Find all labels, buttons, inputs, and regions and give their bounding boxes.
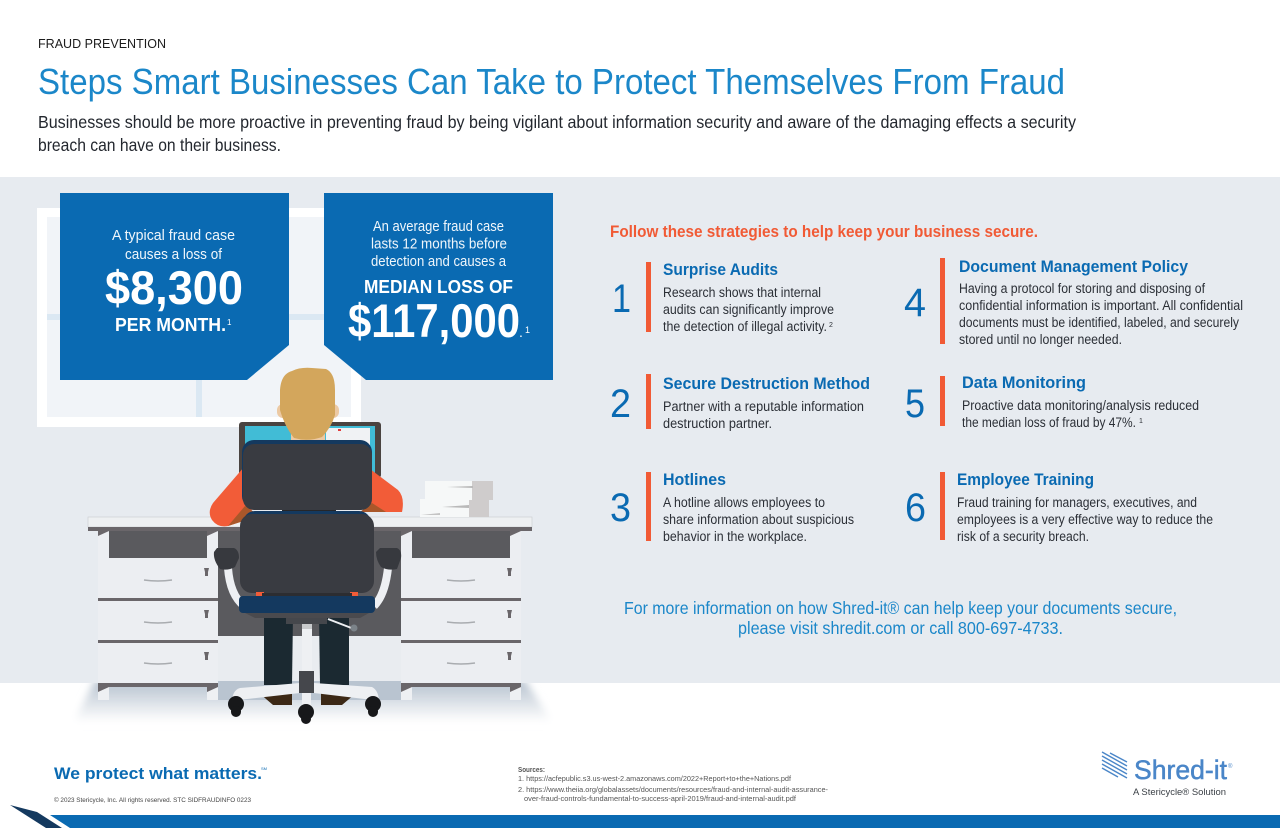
illustration: office scene — [37, 208, 532, 724]
right arm — [366, 469, 403, 512]
callout: median loss: . — [519, 324, 523, 340]
callout: median loss: detection and causes a — [371, 254, 507, 270]
step 5: data monitoring: 5 — [905, 382, 925, 426]
strategies heading: Follow these strategies to help keep your business secure. — [610, 222, 1038, 241]
step 1: surprise audits: audits can significantly improve — [663, 302, 834, 317]
step 4: document management policy: Having a protocol for storing and disposing of — [959, 281, 1205, 296]
sources: 2. https://www.theiia.org/globalassets/documents/resources/fraud-and-internal-audit-assurance- — [518, 785, 829, 794]
lower backrest — [243, 511, 371, 551]
call to action: For more information on how Shred-it® can help keep your documents secure, — [624, 598, 1177, 618]
callout: median loss: lasts 12 months before — [371, 236, 507, 252]
step 3: hotlines: share information about suspicious — [663, 512, 854, 527]
monitor — [239, 422, 381, 478]
step 6: employee training: 6 — [905, 486, 926, 530]
step 3: hotlines: Hotlines — [663, 471, 726, 489]
legs — [264, 615, 293, 685]
step 1: surprise audits: 2 — [829, 322, 833, 329]
step 4: document management policy: confidential information is important. All confidential — [959, 298, 1243, 313]
step 1: surprise audits: 1 — [612, 277, 631, 321]
sources: over-fraud-controls-fundamental-to-success-april-2019/fraud-and-internal-audit.pdf — [524, 794, 796, 803]
callout: monthly loss — [60, 193, 289, 380]
arm supports — [228, 568, 244, 606]
sources — [518, 765, 829, 803]
step 4: document management policy: 4 — [904, 281, 926, 325]
title: Steps Smart Businesses Can Take to Protect Themselves From Fraud — [38, 61, 1065, 102]
call to action: please visit shredit.com or call 800-697-4733. — [738, 618, 1063, 638]
step 5: data monitoring: the median loss of fraud by 47%. — [962, 415, 1136, 430]
callout: median loss — [324, 193, 553, 380]
step 4: document management policy: Document Management Policy — [959, 258, 1189, 276]
footer bar — [10, 805, 1280, 828]
step 3: hotlines: A hotline allows employees to — [663, 495, 825, 510]
step 6: employee training: risk of a security breach. — [957, 529, 1089, 544]
step 2: secure destruction method: Secure Destruction Method — [663, 375, 870, 393]
sources: 1. https://acfepublic.s3.us-west-2.amazonaws.com/2022+Report+to+the+Nations.pdf — [518, 774, 791, 783]
intro text: Businesses should be more proactive in preventing fraud by being vigilant about information security and aware of the damaging effects a security — [38, 112, 1076, 132]
icon: shred stripes — [1102, 752, 1127, 778]
step 6: employee training — [905, 471, 1213, 544]
shoes — [258, 690, 292, 705]
step 2: secure destruction method: 2 — [610, 382, 631, 426]
step 5: data monitoring: Data Monitoring — [962, 374, 1086, 392]
logo: Shred-it: A Stericycle® Solution — [1133, 787, 1226, 798]
armrests — [214, 548, 239, 570]
seat cushion — [256, 592, 264, 597]
left arm — [210, 467, 252, 526]
tagline: SM — [261, 766, 267, 771]
hair — [280, 368, 335, 440]
step 5: data monitoring — [905, 374, 1199, 430]
callout: monthly loss: $8,300 — [105, 261, 243, 314]
person — [210, 368, 403, 705]
tagline: We protect what matters. — [54, 764, 262, 783]
copyright: © 2023 Stericycle, Inc. All rights reserved. STC SIDFRAUDINFO 0223 — [54, 797, 252, 804]
grey band background — [0, 177, 1280, 683]
callout: median loss: An average fraud case — [373, 219, 504, 235]
step 5: data monitoring: Proactive data monitoring/analysis reduced — [962, 398, 1199, 413]
intro text — [38, 112, 1076, 155]
step 6: employee training: Fraud training for managers, executives, and — [957, 495, 1197, 510]
callout: median loss: MEDIAN LOSS OF — [364, 277, 513, 297]
step 4: document management policy — [904, 258, 1243, 347]
sources: Sources: — [518, 765, 545, 774]
step 6: employee training: Employee Training — [957, 471, 1094, 489]
step 3: hotlines — [610, 471, 854, 544]
step 2: secure destruction method — [610, 374, 870, 431]
chair base — [228, 624, 381, 724]
paper stack — [420, 481, 493, 517]
intro text: breach can have on their business. — [38, 135, 281, 155]
logo: Shred-it: ® — [1228, 763, 1233, 770]
upper backrest — [242, 440, 372, 508]
step 2: secure destruction method: Partner with a reputable information — [663, 399, 864, 414]
step 4: document management policy: stored until no longer needed. — [959, 332, 1122, 347]
callout: monthly loss: causes a loss of — [125, 247, 223, 263]
step 1: surprise audits — [612, 261, 834, 334]
callout: median loss: 1 — [525, 325, 530, 335]
step 3: hotlines: behavior in the workplace. — [663, 529, 807, 544]
step 1: surprise audits: the detection of illegal activity. — [663, 319, 827, 334]
step 4: document management policy: documents must be identified, labeled, and securely — [959, 315, 1239, 330]
left pedestal — [98, 531, 218, 700]
step 1: surprise audits: Research shows that internal — [663, 285, 821, 300]
logo: Shred-it: Shred-it — [1134, 755, 1227, 785]
neck and ears — [291, 425, 325, 447]
logo: Shred-it — [1102, 752, 1233, 798]
desk — [88, 517, 532, 700]
step 3: hotlines: 3 — [610, 486, 631, 530]
callout: monthly loss: 1 — [227, 318, 232, 327]
right pedestal — [401, 531, 521, 700]
step 6: employee training: employees is a very effective way to reduce the — [957, 512, 1213, 527]
callout: median loss: $117,000 — [348, 294, 520, 347]
header — [38, 36, 1076, 155]
callout: monthly loss: A typical fraud case — [112, 228, 235, 244]
window — [37, 208, 361, 427]
step 5: data monitoring: 1 — [1139, 418, 1143, 425]
eyebrow label: FRAUD PREVENTION — [38, 36, 166, 51]
floor shadow — [74, 680, 552, 722]
step 2: secure destruction method: destruction partner. — [663, 416, 772, 431]
step 1: surprise audits: Surprise Audits — [663, 261, 778, 279]
call to action — [624, 598, 1177, 638]
callout: monthly loss: PER MONTH. — [115, 315, 226, 335]
office chair — [214, 440, 401, 724]
